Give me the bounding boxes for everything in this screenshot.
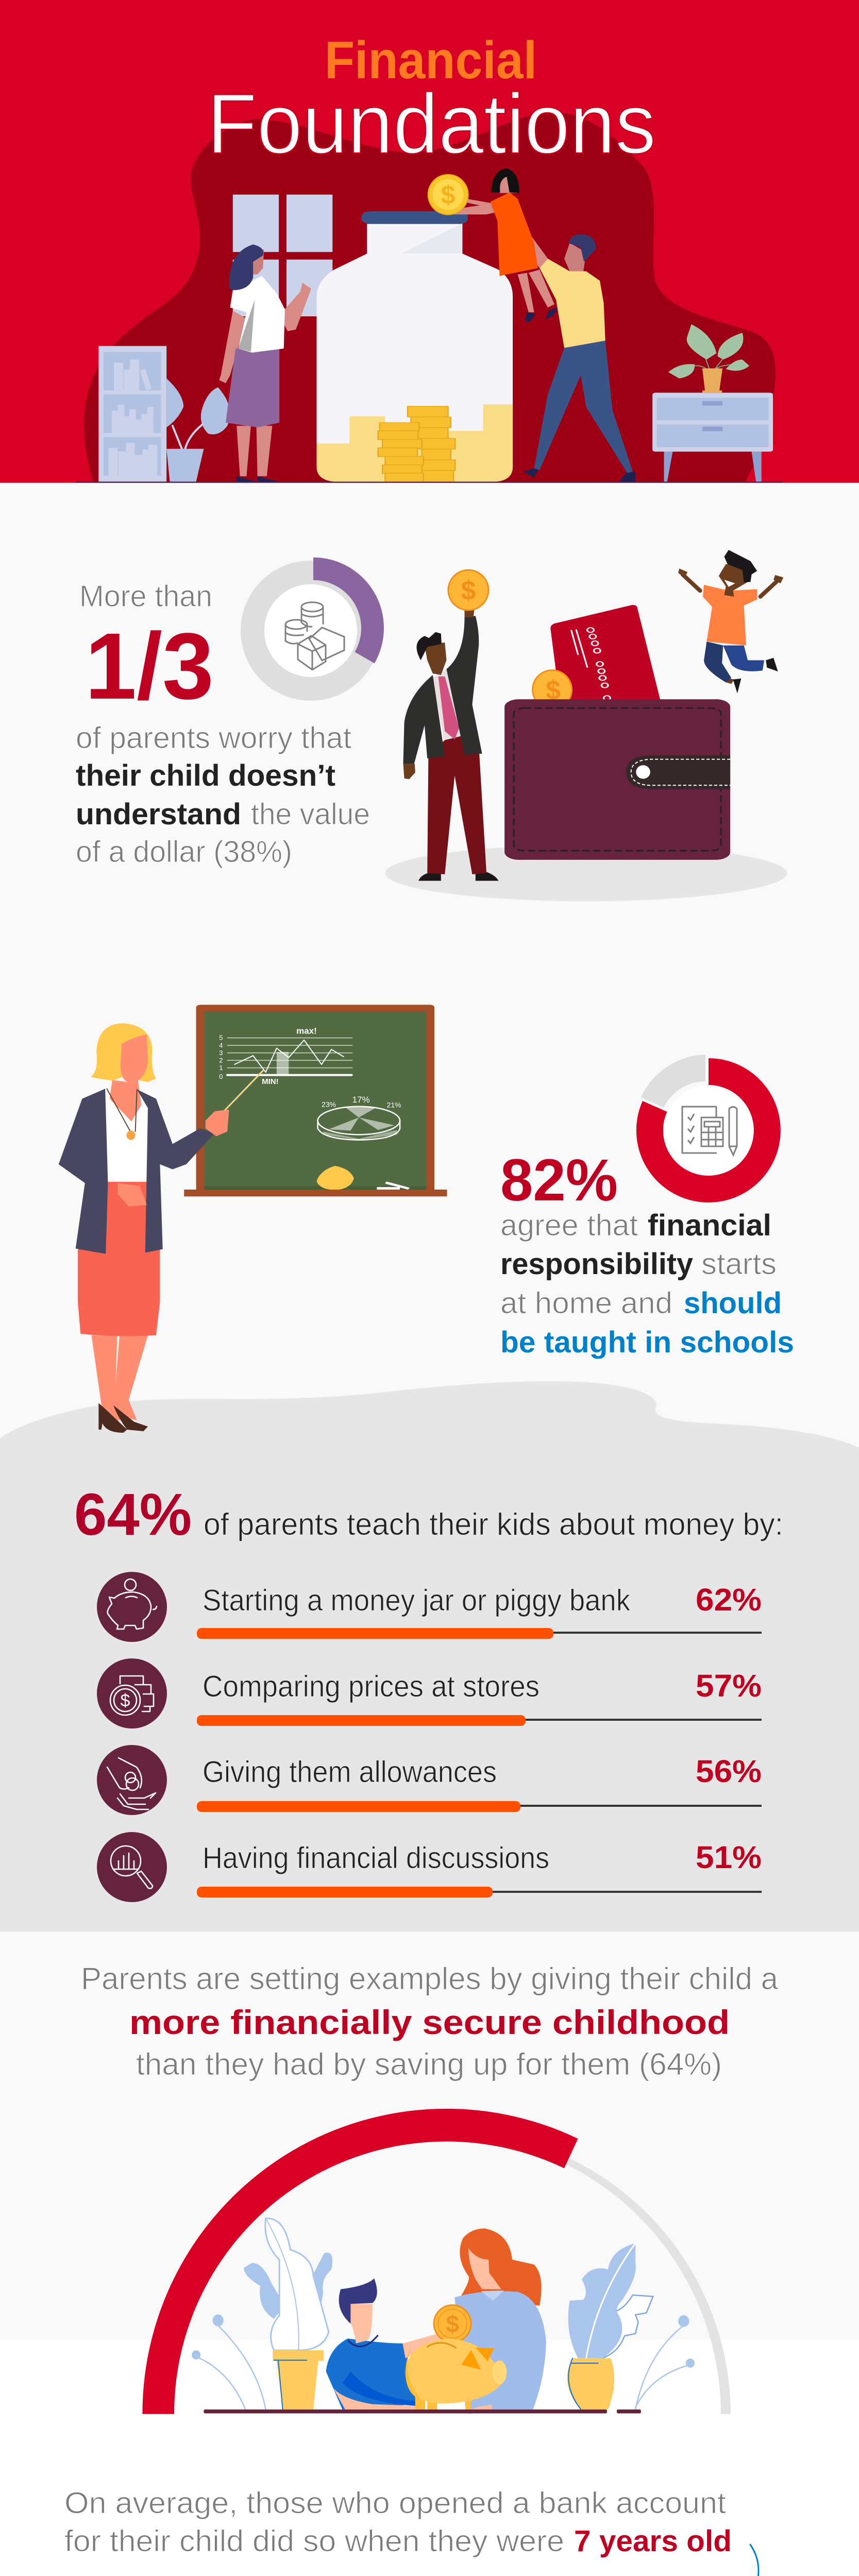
pie chart on board	[318, 1095, 401, 1140]
coin held up	[448, 570, 489, 610]
dollar coin held by girl	[428, 175, 468, 215]
man holding coin	[403, 609, 498, 881]
progress bar	[197, 1628, 762, 1639]
line chart on board: 0	[219, 1073, 223, 1080]
text: opened a bank account at 7	[64, 2486, 732, 2558]
row: comparing prices 57 percent	[97, 1658, 762, 1728]
arrow to donut	[750, 2545, 761, 2576]
title: Foundations	[207, 76, 656, 171]
text: 82 percent agree: agree that	[500, 1209, 638, 1242]
illustration: gauge with parent, child and piggy bank	[142, 2109, 726, 2414]
icon: checklist calculator pencil	[682, 1107, 737, 1155]
line chart on board: 5	[219, 1034, 223, 1042]
panel: hero header	[0, 0, 859, 483]
text: opened a bank account at 7: On average, those who opened a bank account	[64, 2486, 726, 2520]
title	[207, 30, 656, 171]
row: financial discussions 51 percent	[97, 1832, 762, 1902]
line chart on board: 3	[219, 1049, 223, 1057]
coin stacks	[378, 406, 455, 482]
bookshelf	[98, 346, 166, 482]
dollar coin held by girl: $	[441, 181, 456, 210]
hero illustration	[76, 112, 783, 483]
panel: 64 percent teach kids about money	[74, 1482, 783, 1902]
progress bar	[197, 1801, 762, 1812]
text: 82 percent agree: responsibility	[500, 1247, 693, 1281]
value: 56%	[696, 1754, 762, 1789]
value: 51%	[696, 1840, 762, 1875]
text: more than one third: understand	[76, 798, 241, 831]
text: more than one third: 1/3	[85, 613, 214, 719]
line chart on board: MIN!	[262, 1077, 279, 1086]
side table	[652, 393, 773, 482]
text: 82 percent agree: 82%	[500, 1147, 618, 1213]
row: money jar or piggy bank 62 percent	[97, 1572, 762, 1642]
coin in wallet: $	[546, 675, 561, 705]
text: 82 percent agree	[500, 1147, 794, 1359]
girl figure	[450, 168, 558, 321]
pie chart on board: 21%	[387, 1101, 401, 1109]
panel: financially secure childhood	[81, 1961, 779, 2414]
text: more than one third: their child doesn’t	[76, 759, 335, 792]
heading: of parents teach their kids about money by:	[204, 1507, 783, 1541]
illustration: teacher at chalkboard	[59, 1005, 447, 1433]
wallet	[504, 699, 730, 860]
text: more than one third: of parents worry that	[76, 721, 351, 755]
pie chart on board: 17%	[352, 1095, 370, 1105]
plant on table	[668, 324, 749, 393]
grey ground shape	[0, 1381, 859, 1931]
label: Having financial discussions	[203, 1841, 549, 1875]
panel: bank account	[36, 2486, 811, 2576]
line chart on board: 2	[219, 1056, 223, 1064]
label: Giving them allowances	[203, 1755, 497, 1789]
coin in wallet	[533, 670, 572, 709]
left plant	[244, 2218, 332, 2410]
credit card	[550, 605, 661, 702]
text: 82 percent agree: should	[684, 1286, 782, 1320]
text: more than one third: of a dollar (38%)	[76, 835, 292, 869]
pie chart on board: 23%	[322, 1100, 336, 1108]
line chart on board: 1	[219, 1064, 223, 1072]
progress bar	[197, 1887, 762, 1897]
label: Comparing prices at stores	[203, 1670, 540, 1703]
panel: one third of parents	[76, 550, 787, 901]
donut chart 82 percent	[636, 1055, 781, 1202]
window	[233, 195, 332, 316]
woman figure	[219, 244, 311, 482]
icon: coins	[97, 1658, 167, 1728]
icon: coins and cash	[285, 602, 344, 670]
right plant	[567, 2243, 653, 2410]
gauge track	[567, 2161, 726, 2414]
illustration: wallet, man and child	[385, 550, 787, 901]
icon: magnifier with chart	[97, 1832, 167, 1902]
text: setting examples: than they had by saving up for them (64%)	[136, 2047, 722, 2081]
potted plant left	[166, 379, 230, 482]
text: more than one third: the value	[251, 798, 370, 831]
text: more than one third: More than	[79, 580, 212, 613]
icon: hand giving coin	[97, 1745, 167, 1815]
title: Financial	[325, 30, 537, 90]
row: allowances 56 percent	[97, 1745, 762, 1815]
heading: 64%	[74, 1482, 192, 1548]
jar	[316, 211, 513, 482]
table line	[204, 2410, 641, 2413]
line chart on board: max!	[296, 1026, 317, 1036]
donut chart 38 percent	[252, 557, 384, 689]
icon: coins: $	[121, 1691, 130, 1710]
line chart on board	[219, 1026, 352, 1086]
text: opened a bank account at 7: for their child did so when they were	[64, 2524, 564, 2558]
value: 57%	[696, 1668, 762, 1703]
coin held up: $	[461, 575, 476, 605]
decorative stems	[192, 2314, 695, 2410]
mother figure	[454, 2228, 546, 2410]
coin going into piggy bank	[434, 2305, 471, 2342]
jumping boy	[678, 550, 783, 693]
label: Starting a money jar or piggy bank	[203, 1584, 631, 1617]
text: setting examples: Parents are setting examples by giving their child a	[81, 1961, 779, 1996]
progress bar	[197, 1715, 762, 1726]
text: 82 percent agree: be taught in schools	[500, 1326, 794, 1359]
text: 82 percent agree: financial	[648, 1209, 771, 1242]
text: 82 percent agree: starts	[701, 1247, 777, 1281]
panel: 82 percent financial responsibility	[0, 1005, 859, 1931]
icon: piggy bank	[97, 1572, 167, 1642]
text: setting examples: more financially secure childhood	[129, 2003, 730, 2041]
heading	[74, 1482, 783, 1548]
line chart on board: 4	[219, 1041, 223, 1049]
coin going into piggy bank: $	[446, 2310, 459, 2337]
child figure	[326, 2278, 444, 2410]
gauge value 64 percent	[142, 2109, 578, 2414]
text: opened a bank account at 7: 7 years old	[574, 2524, 732, 2558]
piggy bank	[406, 2338, 507, 2414]
teacher	[59, 1023, 263, 1433]
man figure	[510, 229, 635, 482]
value: 62%	[696, 1582, 762, 1617]
text: 82 percent agree: at home and	[500, 1286, 672, 1320]
ground shadow	[385, 845, 787, 901]
text: more than one third	[76, 580, 370, 869]
chalkboard	[184, 1005, 447, 1196]
background blob	[84, 112, 776, 483]
text: setting examples	[81, 1961, 779, 2081]
